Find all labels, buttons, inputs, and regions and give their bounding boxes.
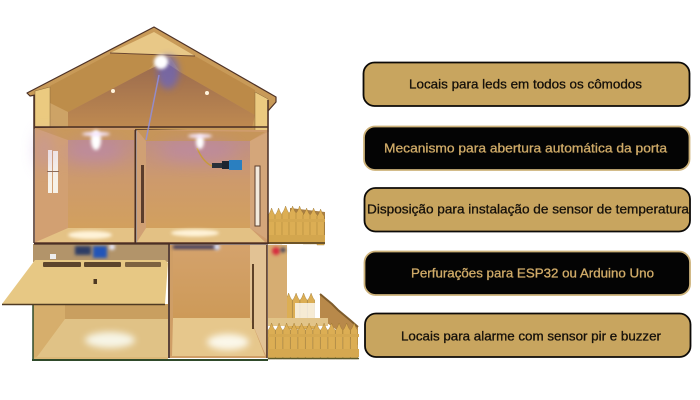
feature button: ESP32 holes [364,252,690,295]
feature button: leds: Locais para leds em todos os cômodos [409,76,643,92]
floor and wall framing [32,95,268,360]
feature button: leds [364,62,690,106]
attic: left post [35,87,50,127]
feature button: temperature sensor: Disposição para instalação de sensor de temperatura [367,202,690,216]
fence: upper balcony [268,206,325,245]
attic: gable panel [110,32,195,56]
illustration: wooden model house [2,27,359,360]
attic: underside right [170,56,255,115]
purple light glow on upper walls [37,130,238,170]
feature button: alarm [365,314,690,357]
led glows [82,55,212,150]
feature button: temperature sensor [364,188,690,232]
outer right wall [268,245,287,318]
feature button: alarm: Locais para alarme com sensor pir e buzzer [401,328,662,344]
roof outline [27,27,276,132]
feature button: door mechanism: Mecanismo para abertura automática da porta [384,140,668,156]
feature button: door mechanism [364,126,690,170]
window slots [47,150,59,193]
attic: side stub wall [50,103,68,127]
upper floor: left room [35,128,135,243]
fence: lower garden front [268,323,359,359]
ground floor: upper band with electronics [33,244,168,262]
attic: underside left [50,54,162,112]
upper floor: right room [137,130,268,243]
temperature sensor [197,148,242,170]
fence: lower garden back and side [268,293,358,345]
ground floor: left room [33,304,168,360]
attic: right post [255,92,268,131]
ground floor: right room [170,244,267,358]
door panel open [2,260,168,304]
feature button: ESP32 holes: Perfurações para ESP32 ou Arduino Uno [411,266,654,280]
attic: back wall [68,62,255,128]
attic: small leds [111,89,209,95]
